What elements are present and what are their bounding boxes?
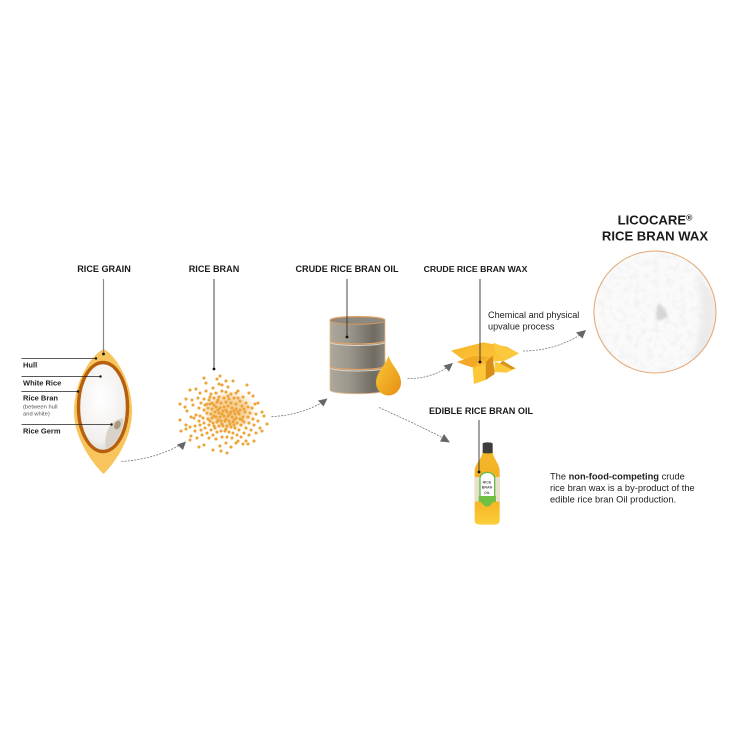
crude wax flakes bbox=[451, 342, 519, 384]
rice bran particle cloud bbox=[180, 376, 267, 453]
heading: crude rice bran oil: CRUDE RICE BRAN OIL bbox=[295, 264, 399, 274]
white rice kernel with bran ring bbox=[78, 362, 128, 452]
arrow: bran to crude oil bbox=[272, 398, 328, 416]
label: hull bbox=[22, 357, 97, 370]
heading: Licocare rice bran wax: ® bbox=[686, 212, 693, 222]
rice germ bbox=[105, 418, 123, 449]
bottle label: OIL bbox=[484, 491, 491, 495]
heading: edible rice bran oil: EDIBLE RICE BRAN OIL bbox=[429, 406, 533, 416]
label: rice germ: Rice Germ bbox=[23, 426, 61, 436]
oil drop bbox=[376, 356, 401, 396]
infographic canvas bbox=[22, 214, 716, 525]
label: rice germ bbox=[22, 423, 113, 436]
text: by-product note: edible rice bran Oil production. bbox=[550, 494, 676, 504]
leader line: edible oil bbox=[478, 420, 480, 473]
leader line: crude wax bbox=[479, 279, 481, 363]
leader line: rice bran bbox=[213, 279, 215, 370]
heading: rice grain: RICE GRAIN bbox=[77, 264, 131, 274]
label: rice bran: (between hull bbox=[23, 404, 57, 410]
barrel hoops bbox=[330, 341, 385, 370]
oil barrel bbox=[330, 316, 385, 394]
leader line: crude oil bbox=[346, 279, 348, 338]
arrow: grain to bran bbox=[122, 442, 186, 462]
arrow: crude wax to Licocare bbox=[523, 330, 586, 351]
arrow: oil to crude wax bbox=[408, 363, 453, 379]
heading: Licocare rice bran wax: RICE BRAN WAX bbox=[602, 228, 708, 244]
label: white rice bbox=[22, 375, 102, 388]
arrow: oil to edible oil bbox=[379, 408, 450, 442]
heading: crude rice bran wax: CRUDE RICE BRAN WAX bbox=[424, 264, 528, 274]
heading: Licocare rice bran wax: LICOCARE bbox=[618, 212, 686, 228]
rice grain illustration bbox=[74, 349, 132, 474]
text: by-product note: rice bran wax is a by-product of the bbox=[550, 483, 695, 493]
text: upvalue process: upvalue process bbox=[488, 322, 555, 332]
grain hull bbox=[74, 349, 132, 474]
label: rice bran bbox=[22, 390, 79, 418]
text: upvalue process: Chemical and physical bbox=[488, 310, 579, 320]
bottle cap bbox=[483, 442, 493, 453]
bottle label: BRAN bbox=[482, 486, 493, 490]
label: white rice: White Rice bbox=[23, 378, 61, 388]
leader line: rice grain bbox=[102, 279, 105, 355]
bottle label: RICE bbox=[483, 481, 492, 485]
label: rice bran: and white) bbox=[23, 412, 50, 418]
label: rice bran: Rice Bran bbox=[23, 394, 58, 402]
text: by-product note: The non-food-competing crude bbox=[550, 472, 685, 482]
bottle body bbox=[475, 451, 500, 525]
heading: rice bran: RICE BRAN bbox=[189, 264, 239, 274]
label: hull: Hull bbox=[23, 360, 37, 370]
edible oil bottle bbox=[475, 442, 500, 525]
bottle label bbox=[475, 472, 500, 506]
wax powder circle bbox=[594, 251, 716, 373]
